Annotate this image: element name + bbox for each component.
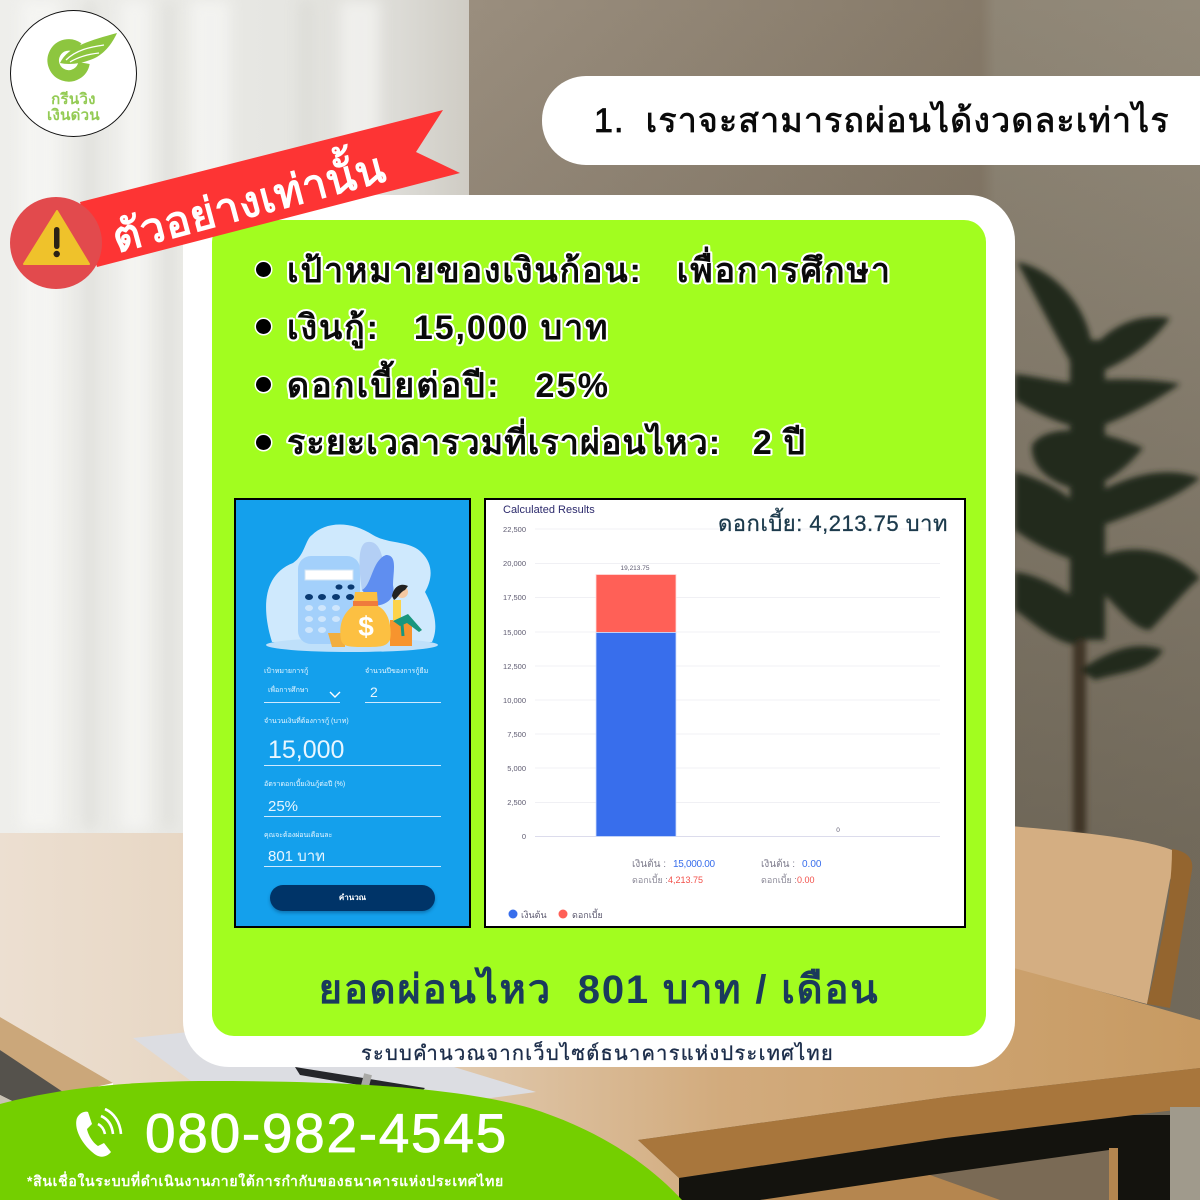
left desk edge (0, 1017, 113, 1095)
loan detail bullets: เงินกู้: 15,000 บาท (287, 309, 609, 347)
legend (508, 908, 603, 920)
source note: ระบบคำนวณจากเว็บไซต์ธนาคารแห่งประเทศไทย (361, 1043, 834, 1065)
stacked bar chart: 0.00 (797, 875, 815, 885)
legend: เงินต้น (521, 910, 547, 920)
interest caption: ดอกเบี้ย: 4,213.75 บาท (718, 511, 948, 536)
question pill heading: 1. เราจะสามารถผ่อนได้งวดละเท่าไร (594, 102, 1170, 140)
green content panel (212, 220, 986, 1036)
paper and pen (133, 1020, 536, 1110)
stacked bar chart: 22,500 (503, 525, 526, 534)
results chart panel (484, 498, 966, 928)
stacked bar chart: เงินต้น : (761, 858, 795, 870)
logo text: กรีนวิง เงินด่วน (47, 91, 100, 124)
stacked bar chart: 4,213.75 (668, 875, 703, 885)
regulatory footnote: *สินเชื่อในระบบที่ดำเนินงานภายใต้การกำกับของธนาคารแห่งประเทศไทย (27, 1173, 504, 1189)
bottom green contact blob (0, 1081, 682, 1200)
phone number: 080-982-4545 (145, 1102, 508, 1164)
stacked bar chart: 19,213.75 (621, 565, 650, 572)
stacked bar chart: 12,500 (503, 662, 526, 671)
illustration: calculator and money bag (266, 524, 438, 652)
stacked bar chart: 0.00 (802, 859, 822, 870)
field: years: จำนวนปีของการกู้ยืม (365, 668, 428, 675)
desk top (0, 833, 1200, 1200)
white card (183, 195, 1015, 1067)
field: amount: จำนวนเงินที่ต้องการกู้ (บาท) (264, 718, 349, 725)
loan detail bullets: เป้าหมายของเงินก้อน: เพื่อการศึกษา (287, 252, 892, 290)
calculator screenshot panel: 801 บาท (268, 848, 325, 865)
stacked bar chart: 10,000 (503, 696, 526, 705)
stacked bar chart: 0 (836, 827, 840, 834)
calculate button: คำนวณ (339, 893, 366, 902)
stacked bar chart: 2,500 (507, 798, 526, 807)
stacked bar chart: 15,000.00 (673, 859, 716, 870)
bar: interest (596, 574, 676, 632)
calculate button (270, 885, 435, 911)
field: interest: อัตราดอกเบี้ยเงินกู้ต่อปี (%) (264, 781, 345, 788)
question pill heading (542, 76, 1200, 165)
loan detail bullets: ระยะเวลารวมที่เราผ่อนไหว: 2 ปี (287, 424, 806, 462)
logo badge (10, 10, 137, 137)
stacked bar chart: 17,500 (503, 593, 526, 602)
loan detail bullets: ดอกเบี้ยต่อปี: 25% (287, 367, 610, 405)
stacked bar chart: 20,000 (503, 559, 526, 568)
stacked bar chart: 5,000 (507, 764, 526, 773)
stacked bar chart: 15,000 (503, 628, 526, 637)
calculator screenshot panel: 15,000 (268, 736, 344, 764)
field: loan goal: เป้าหมายการกู้ (264, 668, 308, 675)
stacked bar chart: ดอกเบี้ย : (632, 873, 668, 885)
logo mark: green wing G (47, 33, 117, 82)
calculator screenshot panel: เพื่อการศึกษา (268, 687, 308, 694)
stacked bar chart: 0 (522, 832, 526, 841)
field: monthly: คุณจะต้องผ่อนเดือนละ (264, 832, 332, 839)
stacked bar chart: เงินต้น : (632, 858, 666, 870)
calculator screenshot panel (234, 498, 471, 928)
warning icon (10, 197, 102, 289)
stacked bar chart: 7,500 (507, 730, 526, 739)
calculator screenshot panel: 25% (268, 798, 298, 815)
chart title: Calculated Results (503, 504, 595, 516)
ribbon text: ตัวอย่างเท่านั้น (105, 135, 391, 263)
red ribbon banner (10, 110, 460, 289)
monthly payment headline: ยอดผ่อนไหว 801 บาท / เดือน (319, 968, 879, 1012)
bar: principal (596, 632, 676, 836)
chair back (1010, 826, 1175, 1004)
stacked bar chart (503, 525, 940, 920)
table front edge, frame and shelf (638, 1068, 1200, 1178)
legend: ดอกเบี้ย (572, 908, 603, 920)
illustration: calculator and money bag: $ (358, 611, 374, 642)
calculator screenshot panel: 2 (370, 684, 378, 700)
stacked bar chart: ดอกเบี้ย : (761, 873, 797, 885)
icon: phone (76, 1108, 122, 1157)
loan detail bullets (254, 244, 892, 462)
